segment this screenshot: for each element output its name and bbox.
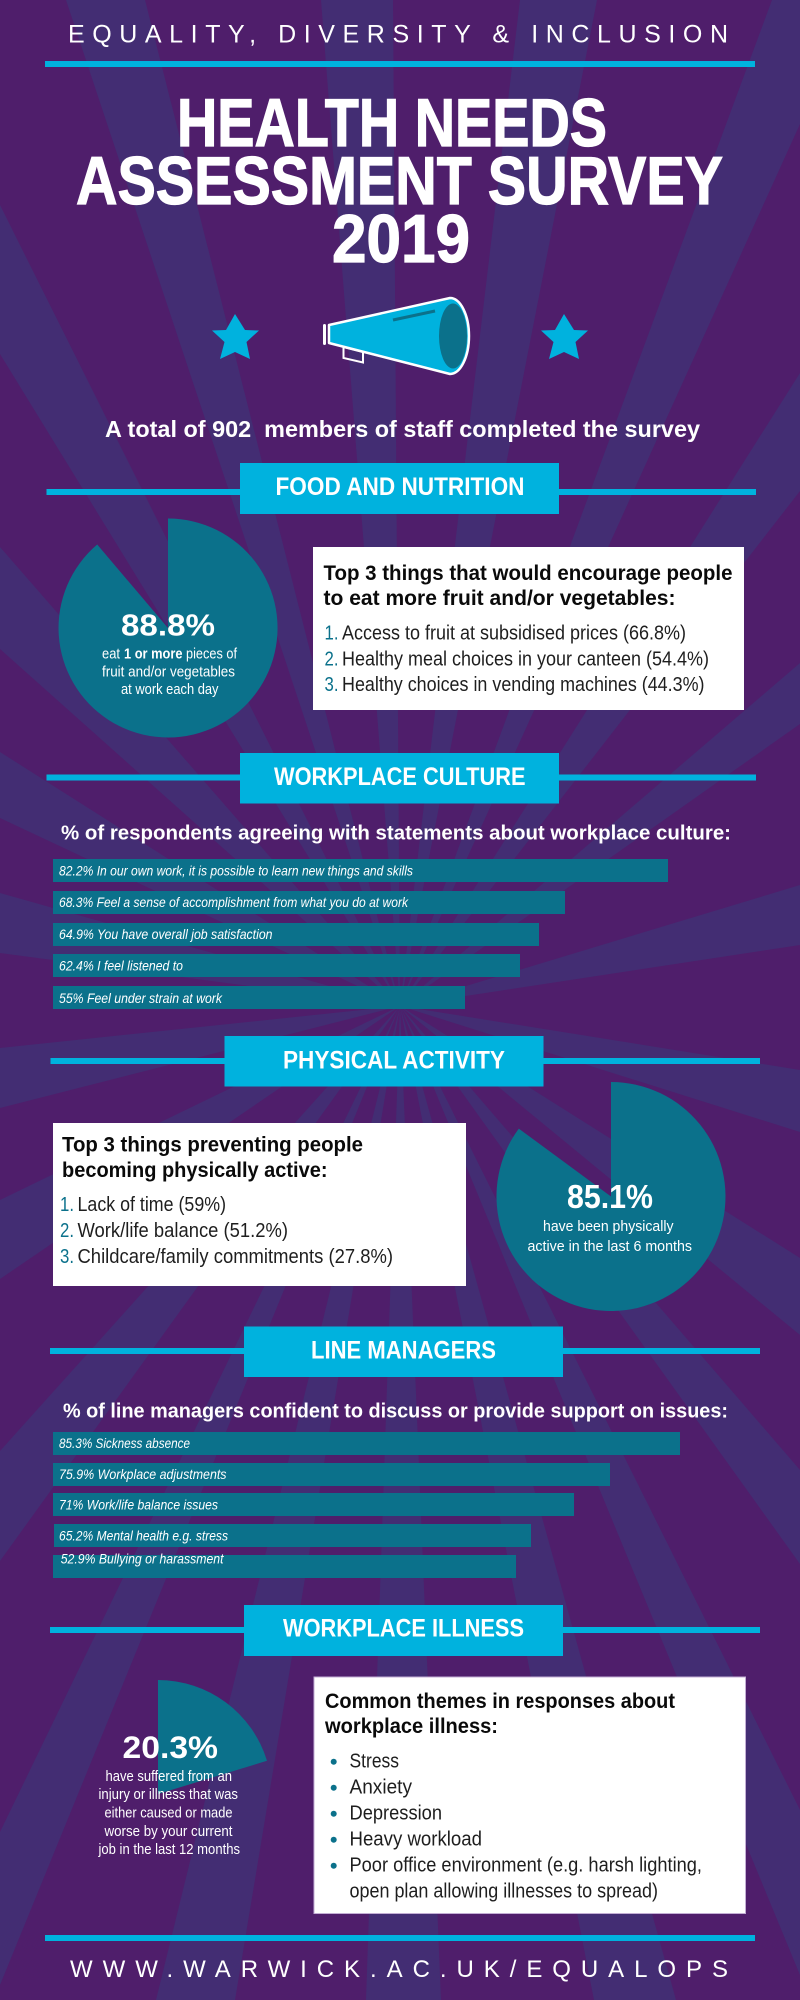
title: HEALTH NEEDS bbox=[177, 85, 607, 161]
chart heading: % of line managers confident to discuss or provide support on issues: bbox=[63, 1400, 728, 1422]
card: top 3 barriers to activity: 1. bbox=[60, 1194, 74, 1216]
title: 2019 bbox=[332, 201, 470, 277]
card: top 3 encouraging fruit and vegetables bbox=[313, 547, 744, 710]
card: common themes: Depression bbox=[350, 1803, 442, 1825]
pie chart: 20.3% bbox=[158, 1680, 267, 1794]
icon: megaphone bbox=[323, 298, 469, 374]
stat: 20.3%: have suffered from an bbox=[106, 1769, 232, 1785]
bar chart: line managers: 52.9% Bullying or harassment bbox=[61, 1550, 224, 1566]
card: top 3 barriers to activity: Top 3 things preventing people bbox=[62, 1134, 363, 1156]
bar chart: workplace culture: 68.3% Feel a sense of accomplishment from what you do at work bbox=[59, 894, 409, 910]
bar chart: line managers: 75.9% Workplace adjustments bbox=[59, 1466, 226, 1482]
bar chart: line managers bbox=[53, 1432, 680, 1578]
icon: left star bbox=[212, 314, 259, 359]
card: top 3 barriers to activity: Lack of time (59%) bbox=[78, 1194, 226, 1216]
section header: workplace culture: WORKPLACE CULTURE bbox=[274, 763, 526, 791]
section header: food and nutrition bbox=[46, 463, 756, 514]
section header: food and nutrition: FOOD AND NUTRITION bbox=[276, 473, 524, 501]
card: top 3 barriers to activity: becoming physically active: bbox=[62, 1159, 328, 1182]
card: top 3 barriers to activity: 2. bbox=[60, 1220, 74, 1242]
stat: 88.8% bbox=[102, 608, 238, 698]
bar chart: workplace culture bbox=[53, 859, 668, 1009]
card: top 3 barriers to activity bbox=[53, 1123, 466, 1286]
stat: 88.8%: 88.8% bbox=[121, 608, 215, 642]
card: common themes: workplace illness: bbox=[324, 1715, 498, 1738]
panel: line managers bbox=[50, 1326, 760, 1578]
organisation heading: EQUALITY, DIVERSITY & INCLUSION bbox=[68, 20, 728, 48]
stat: 20.3%: job in the last 12 months bbox=[98, 1842, 240, 1858]
section header: workplace illness: WORKPLACE ILLNESS bbox=[283, 1614, 524, 1642]
card: top 3 barriers to activity: Work/life balance (51.2%) bbox=[78, 1220, 288, 1242]
stat: 85.1% bbox=[528, 1178, 692, 1255]
card: common themes: Common themes in responses about bbox=[325, 1690, 675, 1713]
card: top 3 encouraging fruit and vegetables: Healthy meal choices in your canteen (54.4%) bbox=[342, 648, 709, 670]
card: common themes: Heavy workload bbox=[350, 1829, 482, 1851]
card: top 3 encouraging fruit and vegetables: Access to fruit at subsidised prices (66.8%) bbox=[342, 622, 686, 644]
stat: 20.3%: worse by your current bbox=[104, 1824, 232, 1840]
stat: 20.3%: injury or illness that was bbox=[98, 1787, 238, 1803]
stat: 88.8%: eat bbox=[102, 646, 120, 662]
card: top 3 encouraging fruit and vegetables: 2. bbox=[324, 648, 338, 670]
card: top 3 encouraging fruit and vegetables: 1. bbox=[324, 622, 338, 644]
top banner bbox=[45, 20, 755, 67]
panel: workplace culture bbox=[46, 753, 756, 1009]
stat: 88.8%: pieces of bbox=[186, 646, 238, 662]
stat: 85.1%: have been physically bbox=[543, 1219, 674, 1235]
card: common themes: Poor office environment (e.g. harsh lighting, bbox=[350, 1855, 702, 1877]
title bbox=[76, 85, 723, 277]
section header: workplace culture bbox=[46, 753, 756, 804]
panel: food and nutrition bbox=[46, 463, 756, 738]
card: common themes: Stress bbox=[350, 1751, 399, 1773]
stat: 88.8%: fruit and/or vegetables bbox=[102, 664, 235, 680]
pie chart: 85.1% bbox=[496, 1082, 725, 1311]
card: common themes: open plan allowing illnesses to spread) bbox=[350, 1881, 658, 1903]
card: top 3 encouraging fruit and vegetables: Healthy choices in vending machines (44.3%) bbox=[342, 674, 704, 696]
bar chart: workplace culture: 55% Feel under strain at work bbox=[59, 990, 223, 1006]
bar chart: workplace culture: 62.4% I feel listened to bbox=[59, 958, 183, 974]
footer url: WWW.WARWICK.AC.UK/EQUALOPS bbox=[70, 1956, 728, 1983]
bar chart: line managers: 65.2% Mental health e.g. stress bbox=[59, 1528, 228, 1544]
intro statement: A total of 902 members of staff completed the survey bbox=[105, 416, 700, 442]
bar chart: line managers: 85.3% Sickness absence bbox=[59, 1435, 190, 1451]
stat: 20.3%: 20.3% bbox=[122, 1729, 218, 1765]
card: top 3 encouraging fruit and vegetables: to eat more fruit and/or vegetables: bbox=[324, 587, 676, 610]
pie chart: 88.8% bbox=[59, 518, 278, 738]
bar chart: workplace culture: 82.2% In our own work, it is possible to learn new things and skills bbox=[59, 862, 413, 878]
card: top 3 encouraging fruit and vegetables: Top 3 things that would encourage people bbox=[324, 562, 732, 585]
stat: 85.1%: active in the last 6 months bbox=[528, 1239, 692, 1255]
card: top 3 barriers to activity: Childcare/family commitments (27.8%) bbox=[78, 1246, 393, 1268]
section header: physical activity: PHYSICAL ACTIVITY bbox=[283, 1046, 505, 1074]
icon: right star bbox=[541, 314, 588, 359]
card: common themes bbox=[314, 1677, 746, 1914]
section header: line managers: LINE MANAGERS bbox=[311, 1336, 496, 1364]
stat: 20.3%: either caused or made bbox=[104, 1806, 232, 1822]
footer bbox=[45, 1935, 755, 1983]
card: common themes: Anxiety bbox=[350, 1777, 412, 1799]
stat: 88.8%: at work each day bbox=[121, 682, 219, 698]
stat: 20.3% bbox=[98, 1729, 240, 1858]
chart heading: % of respondents agreeing with statements about workplace culture: bbox=[61, 822, 731, 844]
section header: line managers bbox=[50, 1326, 760, 1377]
panel: workplace illness bbox=[50, 1605, 760, 1914]
section header: physical activity bbox=[50, 1036, 760, 1086]
stat: 88.8%: 1 or more bbox=[124, 646, 182, 662]
bar chart: line managers: 71% Work/life balance issues bbox=[59, 1496, 218, 1512]
card: top 3 encouraging fruit and vegetables: 3. bbox=[324, 674, 338, 696]
section header: workplace illness bbox=[50, 1605, 760, 1656]
card: top 3 barriers to activity: 3. bbox=[60, 1246, 74, 1268]
bar chart: workplace culture: 64.9% You have overall job satisfaction bbox=[59, 926, 273, 942]
stat: 85.1%: 85.1% bbox=[567, 1178, 653, 1215]
panel: physical activity bbox=[50, 1036, 760, 1311]
